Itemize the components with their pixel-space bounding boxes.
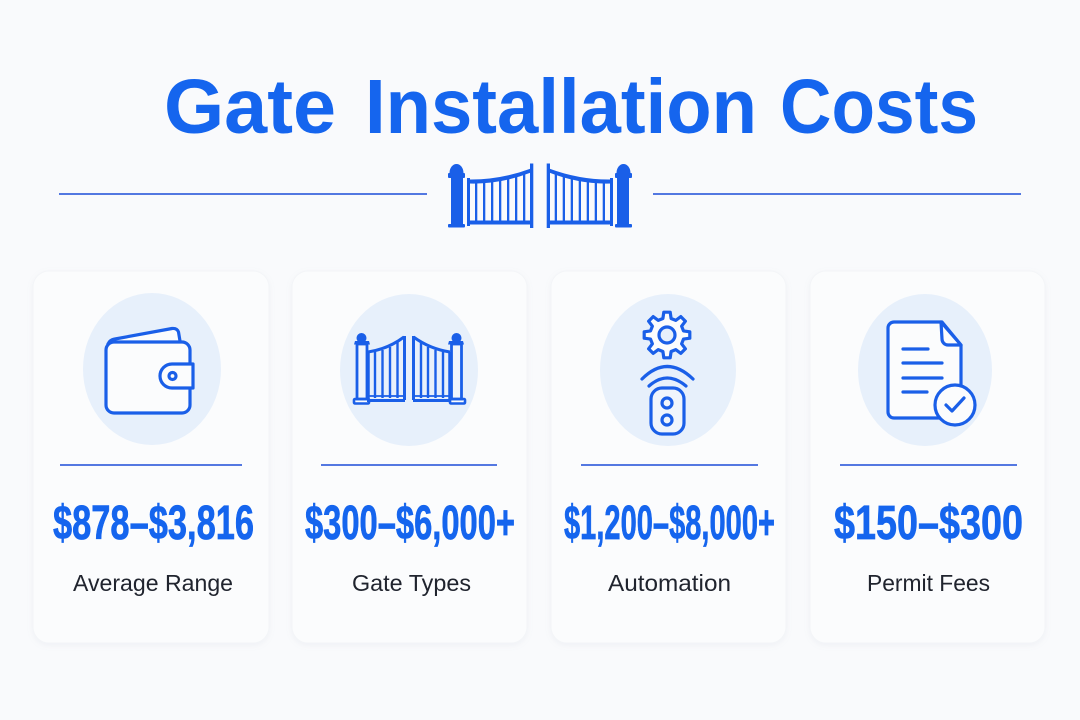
label: automation: Automation [608,570,731,596]
title: Installation [365,64,757,150]
header divider with gate icon [59,164,1021,228]
icon: wallet [106,328,193,413]
title [164,64,978,150]
value: average range: $878–$3,816 [53,497,254,550]
icon: gate [354,333,465,404]
label: average range: Average Range [73,570,233,596]
icon: header gate [448,164,632,228]
title: Costs [780,64,978,150]
value: permit fees: $150–$300 [834,497,1023,550]
label: permit fees: Permit Fees [867,570,990,596]
value: automation: $1,200–$8,000+ [564,497,775,550]
icon: gear and remote [642,312,693,434]
icon: document with check [888,322,975,425]
panel: permit fees [810,271,1045,643]
title: Gate [164,64,336,150]
label: gate types: Gate Types [352,570,471,596]
panel: gate types [292,271,527,643]
panel: average range [33,271,269,643]
value: gate types: $300–$6,000+ [305,497,515,550]
panel: automation [551,271,786,643]
